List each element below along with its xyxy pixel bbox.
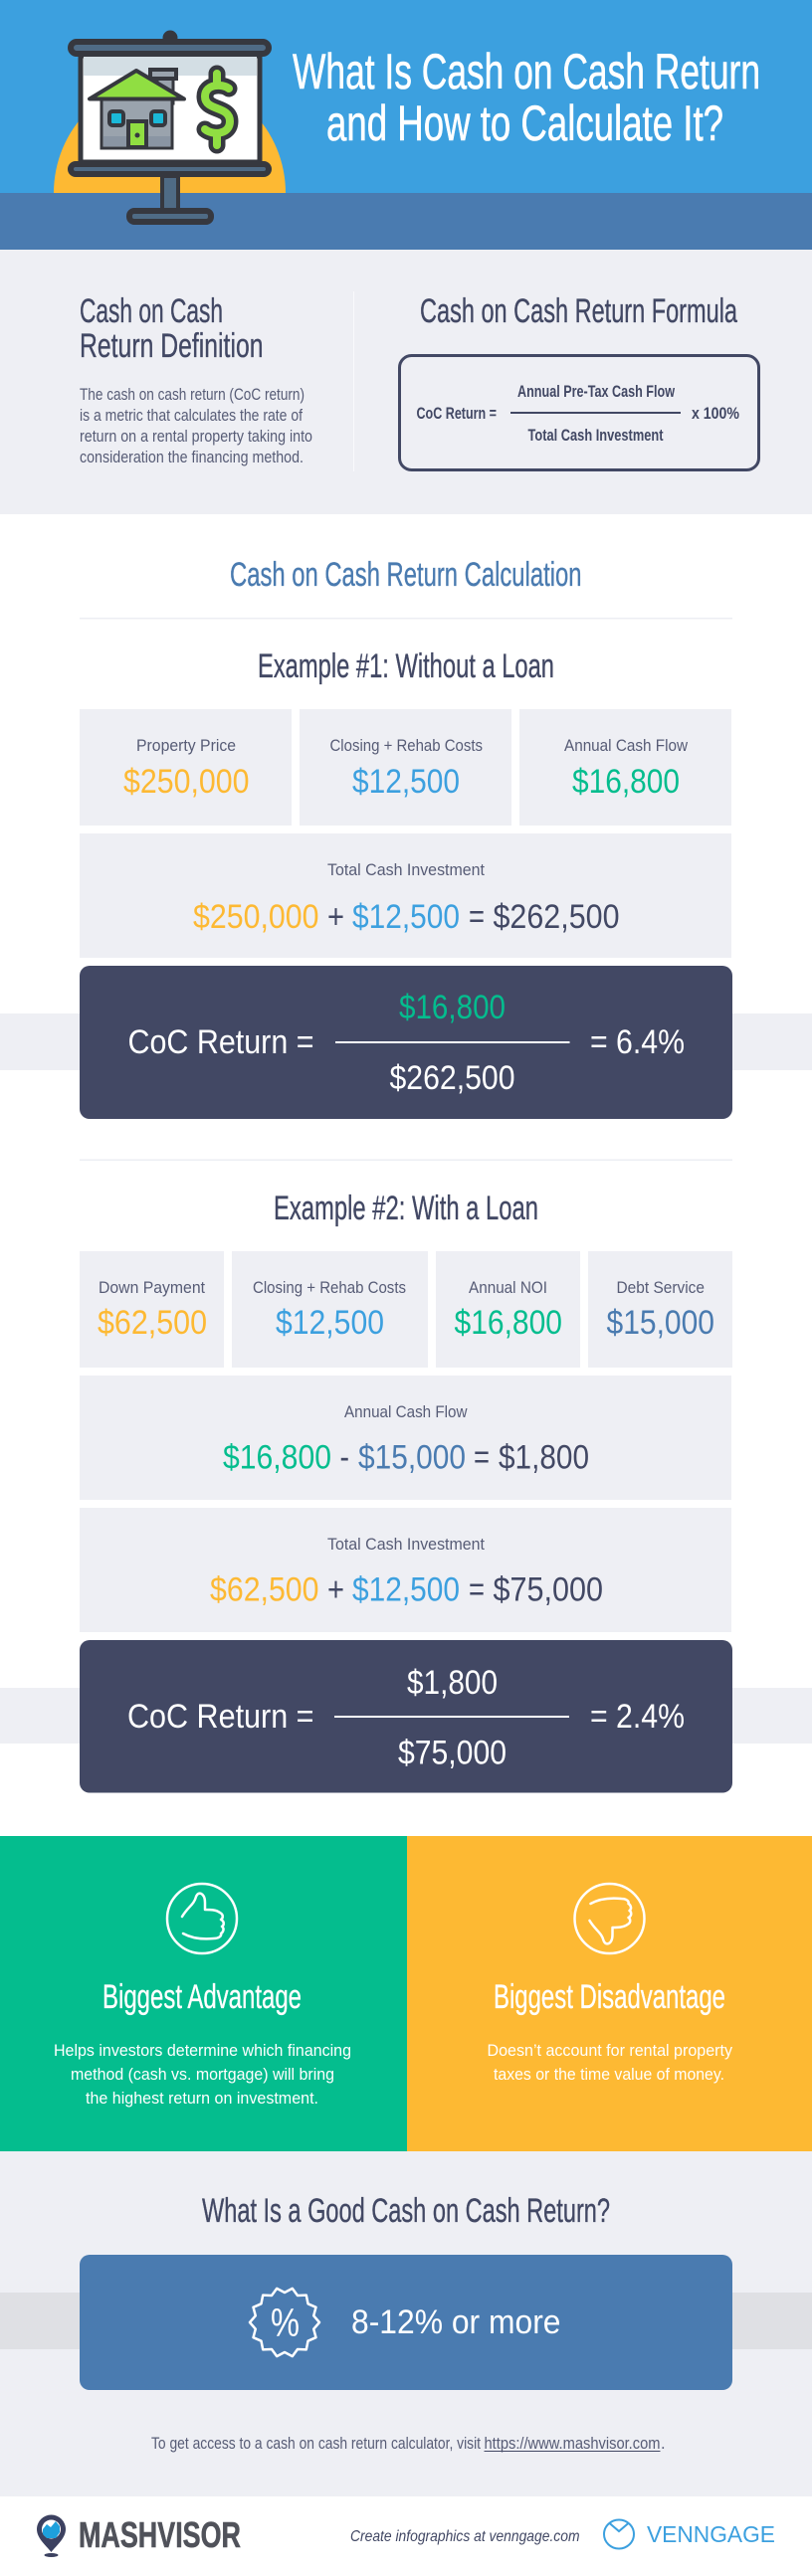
- text: definition paragraph: The cash on cash return (CoC return): [80, 386, 304, 404]
- formula box: Total Cash Investment: [527, 426, 664, 445]
- card: total cash investment: Total Cash Investment: [327, 860, 485, 879]
- text: venngage credit: Create infographics at venngage.com: [350, 2528, 579, 2545]
- card: annual NOI: Annual NOI: [469, 1278, 547, 1297]
- heading: example 2: Example #2: With a Loan: [274, 1190, 538, 1227]
- icon: percent badge: [250, 2289, 319, 2356]
- card: down payment: $62,500: [98, 1304, 207, 1342]
- card: total cash investment calculation: +: [327, 1571, 344, 1609]
- card: annual cash flow: Annual Cash Flow: [564, 736, 689, 755]
- card: total cash investment calculation: $75,000: [494, 1571, 603, 1609]
- text: disadvantage description: [488, 2042, 733, 2084]
- card: annual cash flow: [519, 709, 731, 826]
- card: total cash investment calculation: Total Cash Investment: [327, 1535, 485, 1554]
- text: disadvantage description: taxes or the time value of money.: [494, 2066, 724, 2084]
- callout: 8-12% or more: [80, 2255, 732, 2390]
- card: down payment: [80, 1251, 224, 1368]
- card: annual cash flow calculation: [80, 1376, 731, 1500]
- card: debt service: Debt Service: [617, 1278, 705, 1297]
- formula box: x 100%: [692, 404, 739, 423]
- card: annual cash flow calculation: Annual Cash Flow: [344, 1402, 468, 1421]
- formula box: [400, 356, 758, 469]
- panel: CoC return result 2: $1,800: [407, 1664, 498, 1702]
- text: definition paragraph: consideration the financing method.: [80, 449, 304, 466]
- card: annual cash flow calculation: $16,800: [223, 1438, 331, 1476]
- card: closing and rehab costs: Closing + Rehab Costs: [253, 1278, 406, 1297]
- callout: 8-12% or more: 8-12% or more: [351, 2303, 561, 2341]
- logo: Mashvisor: MASHVISOR: [79, 2514, 241, 2555]
- card: property price: Property Price: [136, 736, 236, 755]
- icon: thumbs down: [575, 1884, 645, 1953]
- panel: CoC return result 2: = 2.4%: [590, 1698, 685, 1736]
- card: closing and rehab costs: Closing + Rehab Costs: [330, 736, 483, 755]
- panel: CoC return result 2: [80, 1640, 732, 1792]
- card: down payment: Down Payment: [99, 1278, 205, 1297]
- card: total cash investment: =: [469, 898, 485, 936]
- icon: percent badge: %: [271, 2301, 300, 2345]
- panel: CoC return result 2: $75,000: [398, 1735, 507, 1772]
- text: calculator link note: https://www.mashvisor.com: [484, 2435, 661, 2453]
- panel: CoC return result 1: [80, 966, 732, 1119]
- heading: biggest advantage: Biggest Advantage: [102, 1978, 302, 2016]
- panel: CoC return result 1: = 6.4%: [590, 1023, 685, 1061]
- heading: definition: [80, 292, 263, 365]
- icon: yellow sun behind screen: [54, 77, 286, 193]
- heading: good return: What Is a Good Cash on Cash Return?: [202, 2192, 610, 2230]
- card: closing and rehab costs: [232, 1251, 428, 1368]
- panel: CoC return result 1: $262,500: [390, 1059, 515, 1097]
- panel: biggest advantage: [0, 1836, 407, 2151]
- header banner: [0, 0, 812, 250]
- formula box: CoC Return =: [416, 404, 497, 423]
- text: disadvantage description: Doesn’t account for rental property: [488, 2042, 733, 2060]
- text: advantage description: method (cash vs. mortgage) will bring: [71, 2066, 334, 2084]
- card: property price: [80, 709, 292, 826]
- card: total cash investment: $250,000: [193, 898, 318, 936]
- heading: definition: Cash on Cash: [80, 292, 223, 330]
- card: total cash investment calculation: $12,500: [352, 1571, 460, 1609]
- icon: projector screen with house and dollar: [71, 30, 269, 222]
- card: closing and rehab costs: $12,500: [352, 763, 460, 801]
- text: advantage description: Helps investors determine which financing: [54, 2042, 351, 2060]
- card: total cash investment: $12,500: [352, 898, 460, 936]
- card: total cash investment: +: [327, 898, 344, 936]
- heading: calculation: Cash on Cash Return Calculation: [230, 556, 581, 594]
- card: total cash investment calculation: =: [469, 1571, 485, 1609]
- icon: thumbs up: [167, 1884, 237, 1953]
- heading: definition: Return Definition: [80, 327, 263, 365]
- card: property price: $250,000: [123, 763, 249, 801]
- text: advantage description: the highest return on investment.: [86, 2090, 318, 2108]
- card: total cash investment calculation: [80, 1508, 731, 1632]
- logo: Venngage: [604, 2520, 775, 2548]
- heading: example 1: Example #1: Without a Loan: [258, 647, 554, 685]
- card: closing and rehab costs: [300, 709, 511, 826]
- card: annual cash flow calculation: =: [474, 1438, 490, 1476]
- card: total cash investment calculation: $62,500: [210, 1571, 318, 1609]
- card: total cash investment: $262,500: [494, 898, 619, 936]
- panel: definition and formula: [0, 250, 812, 514]
- panel: CoC return result 1: CoC Return =: [127, 1023, 314, 1061]
- text: calculator link note: .: [661, 2435, 666, 2453]
- panel: CoC return result 1: $16,800: [399, 989, 506, 1026]
- formula box: Annual Pre-Tax Cash Flow: [517, 382, 676, 401]
- logo: Mashvisor: [37, 2514, 241, 2557]
- card: debt service: $15,000: [607, 1304, 714, 1342]
- card: closing and rehab costs: $12,500: [276, 1304, 384, 1342]
- card: annual cash flow: $16,800: [572, 763, 680, 801]
- card: annual cash flow calculation: $15,000: [358, 1438, 466, 1476]
- panel: biggest disadvantage: [407, 1836, 812, 2151]
- card: annual cash flow calculation: -: [340, 1438, 349, 1476]
- card: total cash investment: [80, 833, 731, 958]
- text: definition paragraph: [80, 386, 312, 466]
- card: annual NOI: $16,800: [454, 1304, 562, 1342]
- text: definition paragraph: return on a rental property taking into: [80, 428, 312, 446]
- panel: good cash on cash return: [0, 2151, 812, 2496]
- text: calculator link note: To get access to a cash on cash return calculator, visit: [151, 2435, 481, 2453]
- logo: Venngage: VENNGAGE: [647, 2521, 775, 2547]
- text: advantage description: [54, 2042, 351, 2108]
- card: debt service: [588, 1251, 732, 1368]
- card: annual NOI: [436, 1251, 580, 1368]
- panel: CoC return result 2: CoC Return =: [127, 1698, 314, 1736]
- text: definition paragraph: is a metric that calculates the rate of: [80, 407, 303, 425]
- title: [293, 44, 760, 151]
- card: annual cash flow calculation: $1,800: [499, 1438, 589, 1476]
